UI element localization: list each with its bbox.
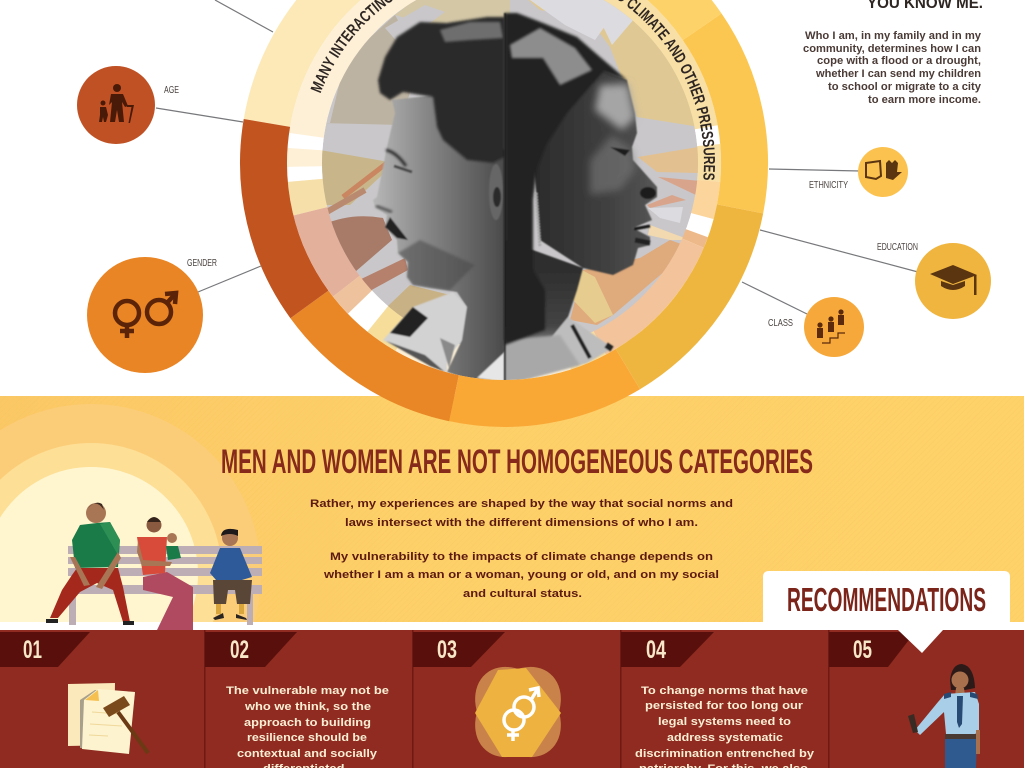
text block: panel 04 — [635, 685, 815, 768]
text block: panel 02: The vulnerable may not be — [226, 685, 389, 697]
text block: who I am: cope with a flood or a drought, — [817, 55, 981, 67]
tab 01: 01 — [23, 636, 42, 664]
woman shirt — [523, 316, 610, 379]
text block: who I am — [803, 30, 982, 106]
text block: experiences: Rather, my experiences are shaped by the way that social norms and — [310, 498, 733, 510]
text block: panel 04: discrimination entrenched by — [635, 748, 815, 760]
icon: linked gender symbols — [458, 650, 578, 768]
text block: panel 02: resilience should be — [247, 732, 367, 744]
label: gender: GENDER — [187, 258, 217, 269]
label: class: CLASS — [768, 318, 793, 329]
text block: panel 02 — [226, 685, 389, 768]
photo: man in profile — [373, 17, 510, 382]
background band — [0, 396, 1024, 622]
text block: experiences: and cultural status. — [463, 588, 582, 600]
man — [46, 503, 134, 625]
tab 03: 03 — [437, 636, 457, 664]
inner band and chords — [287, 0, 721, 380]
recommendations panels — [0, 630, 1024, 768]
tab 02 — [205, 632, 297, 667]
woman hair — [505, 13, 627, 345]
text block: panel 02: contextual and socially — [237, 748, 378, 760]
label: ethnicity: ETHNICITY — [809, 180, 848, 191]
bench — [68, 546, 262, 625]
tab 02: 02 — [230, 636, 249, 664]
photo: woman in profile — [504, 13, 657, 382]
white ground strip — [0, 622, 1024, 630]
text block: panel 04: To change norms that have — [641, 685, 808, 697]
woman earring — [536, 193, 540, 247]
icon: gender — [87, 257, 203, 373]
woman neck — [519, 249, 584, 340]
recommendations tab — [763, 571, 1010, 653]
icon: ethnicity — [858, 147, 908, 197]
icon: age — [77, 66, 155, 144]
woman face — [533, 70, 657, 275]
text block: who I am: to earn more income. — [868, 94, 981, 106]
man hair — [378, 17, 505, 163]
text block: panel 04: legal systems need to — [658, 716, 791, 728]
tab 03 — [413, 632, 505, 667]
text block: experiences — [310, 498, 733, 600]
boy — [210, 529, 252, 620]
text block: panel 02: who we think, so the — [244, 701, 371, 713]
text block: experiences: My vulnerability to the impacts of climate change depends on — [330, 551, 713, 563]
text block: experiences: whether I am a man or a woman, young or old, and on my social — [323, 569, 719, 581]
tab 04: 04 — [646, 636, 666, 664]
tab 05 — [829, 632, 915, 667]
outer ring segments — [264, 0, 745, 403]
icon: class — [804, 297, 864, 357]
woman and baby — [137, 517, 193, 630]
text block: who I am: Who I am, in my family and in my — [805, 30, 982, 42]
man face and neck — [373, 95, 505, 382]
icon: gavel and papers — [68, 683, 148, 754]
icon: education — [915, 243, 991, 319]
chord disc — [320, 0, 722, 351]
text block: who I am: whether I can send my children — [815, 68, 981, 80]
man shirt — [383, 292, 467, 373]
text block: panel 02: approach to building — [244, 717, 371, 729]
icon: police officer — [908, 664, 980, 768]
sun rings — [0, 404, 261, 622]
connector lines — [156, 0, 918, 314]
text block: who I am: to school or migrate to a city — [828, 81, 982, 93]
illustration: family on bench — [46, 503, 262, 630]
tab 01 — [0, 632, 90, 667]
text block: panel 04: persisted for too long our — [645, 700, 804, 712]
tab 04 — [621, 632, 714, 667]
text block: experiences: laws intersect with the different dimensions of who I am. — [345, 517, 698, 529]
text block: panel 04: address systematic — [667, 732, 783, 744]
label: education: EDUCATION — [877, 242, 918, 253]
tab 05: 05 — [853, 636, 872, 664]
text block: who I am: community, determines how I can — [803, 43, 981, 55]
central portrait ring — [240, 0, 768, 427]
label: age: AGE — [164, 85, 179, 96]
